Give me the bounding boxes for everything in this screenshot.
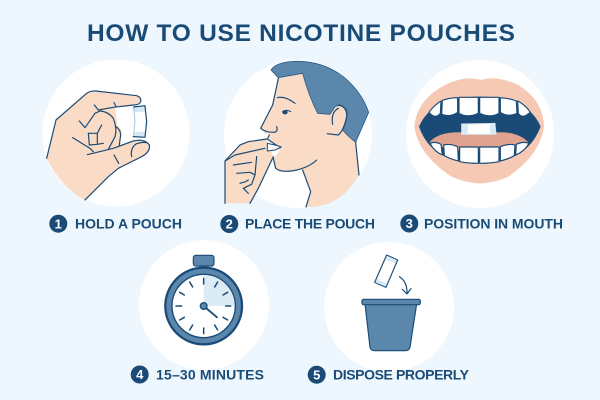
illustration: open mouth (414, 78, 544, 183)
illustration: hand holding pouch (47, 91, 149, 200)
illustration: bin with falling pouch (362, 255, 420, 351)
icon background circle 2 (224, 60, 372, 208)
label 2: PLACE THE POUCH (245, 216, 375, 232)
lower teeth (430, 142, 442, 155)
step badge 1: 1 (55, 216, 62, 231)
title: HOW TO USE NICOTINE POUCHES (87, 20, 515, 47)
illustration: man placing pouch (225, 61, 369, 207)
step badge 2: 2 (226, 217, 233, 232)
step badge 5: 5 (313, 367, 320, 382)
panel: step 4 15-30 minutes (131, 240, 269, 384)
pouch (462, 123, 496, 134)
label 3: POSITION IN MOUTH (424, 216, 563, 232)
pouch (133, 106, 147, 137)
icon background circle 5 (324, 242, 454, 372)
step badge 1 (49, 215, 67, 233)
step badge 5 (308, 366, 326, 384)
step badge 3: 3 (406, 216, 413, 231)
hand (225, 139, 273, 203)
pouch (267, 143, 281, 151)
step badge 2 (220, 215, 238, 233)
upper teeth (429, 101, 441, 116)
label 4: 15–30 MINUTES (156, 366, 264, 382)
step badge 4 (131, 366, 149, 384)
panel: step 1 hold a pouch (42, 60, 190, 233)
panel: step 5 dispose properly (308, 242, 470, 384)
label 1: HOLD A POUCH (75, 216, 182, 232)
step badge 3 (400, 214, 418, 232)
label 5: DISPOSE PROPERLY (333, 366, 470, 382)
panel: step 2 place the pouch (220, 60, 375, 233)
illustration: stopwatch (165, 255, 242, 344)
icon background circle 4 (139, 240, 269, 370)
step badge 4: 4 (136, 367, 144, 382)
icon background circle 1 (42, 60, 190, 206)
icon background circle 3 (406, 60, 554, 208)
panel: step 3 position in mouth (400, 60, 563, 232)
